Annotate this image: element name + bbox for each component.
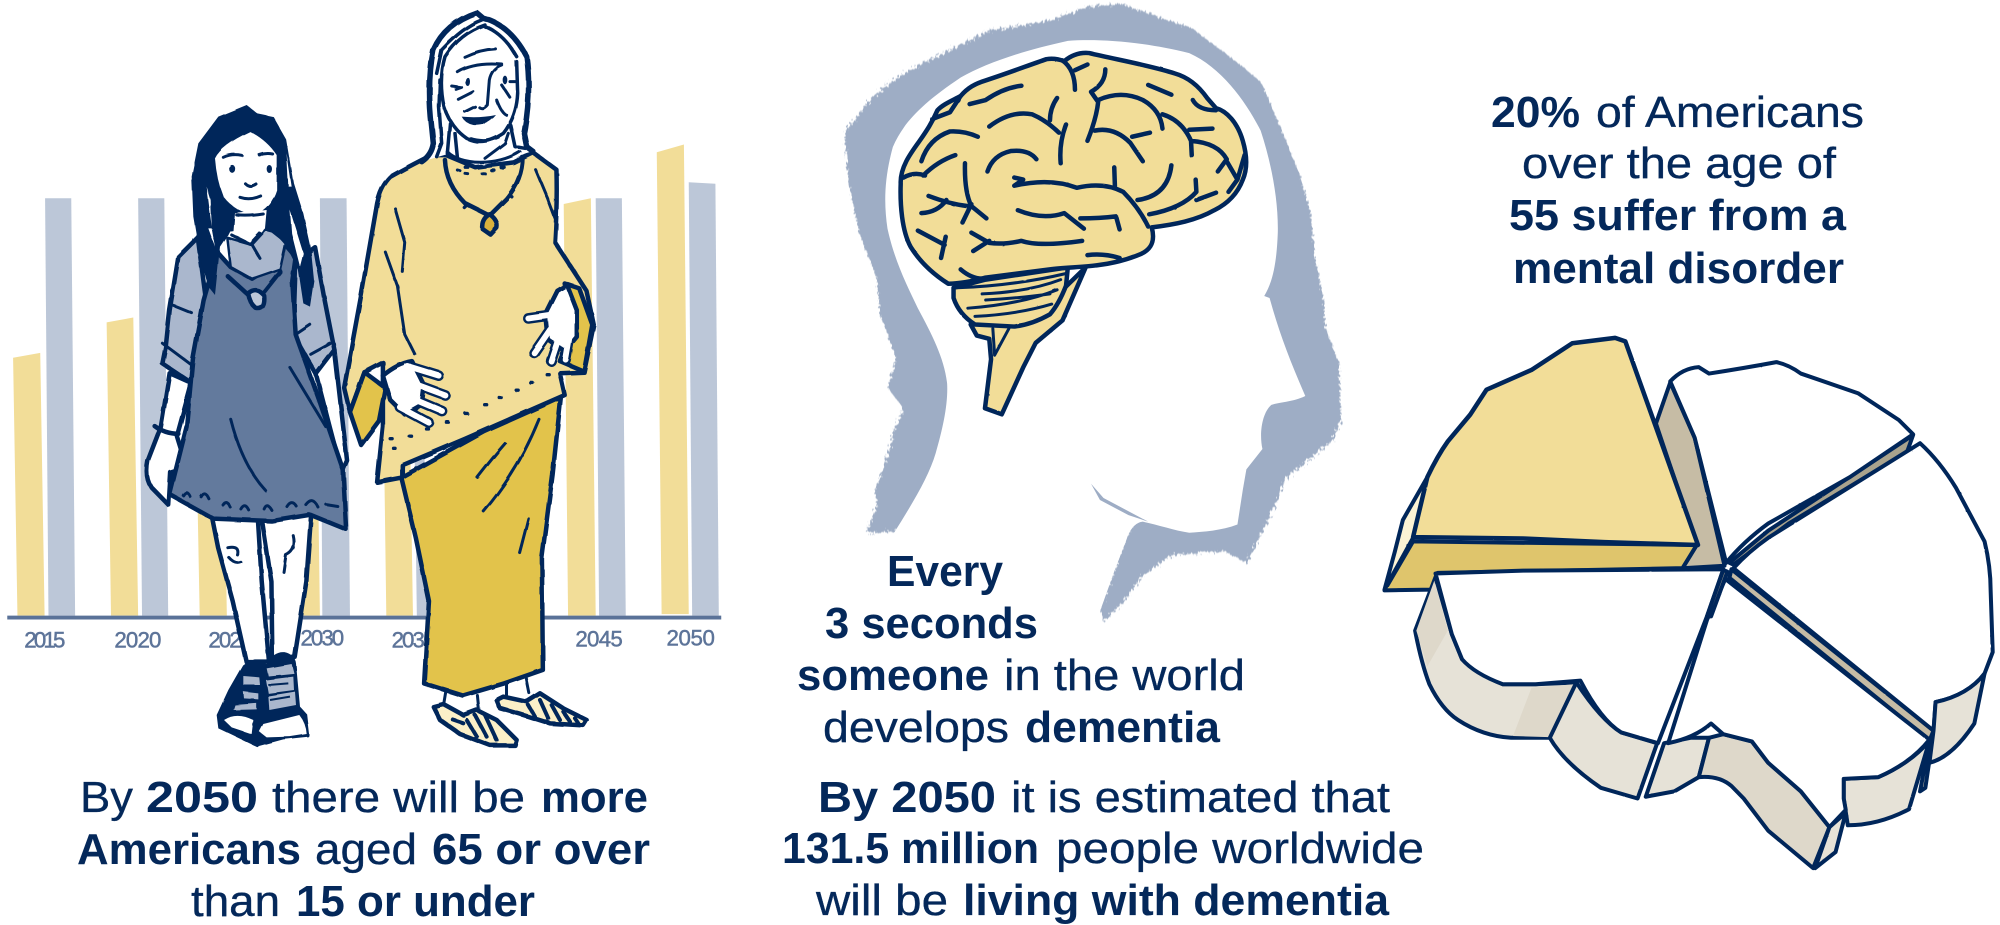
- brain sulci: [904, 60, 1245, 279]
- caption: every 3 seconds: 3 seconds: [825, 599, 1038, 648]
- woman shoes: [433, 693, 587, 745]
- cerebrum: [901, 53, 1246, 284]
- yellow wedge front side: [1384, 541, 1697, 590]
- sliver side of yellow wedge: [1384, 477, 1427, 590]
- woman skirt: [401, 397, 561, 696]
- caption: every 3 seconds: dementia: [1025, 703, 1221, 752]
- wedge side: inner shadow: [1656, 382, 1725, 568]
- girl right arm: [316, 350, 347, 473]
- woman sleeve linings: [350, 284, 592, 445]
- illustration: young girl: [147, 105, 347, 747]
- girl legs: [212, 514, 311, 662]
- caption: mental disorder statistic: [1491, 88, 1864, 293]
- caption: mental disorder statistic: mental disorder: [1513, 244, 1844, 293]
- caption: population: Americans: [77, 825, 301, 874]
- brain illustration: [901, 53, 1246, 414]
- bar chart: population by year: 2050: [666, 626, 715, 651]
- woman necklace: [445, 158, 523, 235]
- caption: dementia 2050 estimate: By 2050: [818, 773, 996, 822]
- caption: every 3 seconds: Every: [887, 547, 1004, 596]
- girl head and hair: [192, 105, 314, 307]
- panel: pie chart: [1384, 338, 1993, 868]
- bar chart: population by year: 2015: [24, 628, 65, 653]
- caption: every 3 seconds: [797, 547, 1245, 752]
- caption: dementia 2050 estimate: 131.5 million: [782, 824, 1039, 873]
- woman right hand: [528, 285, 577, 361]
- white slice: bottom right: [1668, 579, 1929, 827]
- caption: dementia 2050 estimate: it is estimated that: [1011, 773, 1390, 822]
- yellow wedge top: 20 percent: [1413, 338, 1698, 545]
- woman ankles: [444, 676, 529, 710]
- white slice: top: [1729, 435, 1913, 565]
- brainstem: [971, 267, 1086, 414]
- caption: every 3 seconds: someone: [797, 651, 989, 700]
- woman tunic: [344, 153, 594, 482]
- bar chart: population by year: [7, 144, 721, 653]
- woman left hand: [383, 361, 445, 423]
- girl left arm and hand: [147, 373, 191, 505]
- caption: population: aged: [315, 825, 417, 874]
- bar chart: population by year: 2045: [575, 627, 623, 652]
- caption: every 3 seconds: develops: [823, 703, 1009, 752]
- caption: dementia 2050 estimate: people worldwide: [1056, 824, 1424, 873]
- white slice: right: [1729, 569, 1934, 741]
- caption: mental disorder statistic: over the age of: [1522, 139, 1837, 188]
- caption: mental disorder statistic: of Americans: [1596, 88, 1864, 137]
- caption: every 3 seconds: in the world: [1004, 651, 1245, 700]
- white slice: bottom left: [1436, 569, 1723, 743]
- caption: population: 2050: [146, 773, 258, 822]
- caption: population: 15 or under: [296, 877, 535, 925]
- caption: population: there will be: [272, 773, 525, 822]
- caption: mental disorder statistic: 20%: [1491, 88, 1580, 137]
- caption: dementia 2050 estimate: will be: [815, 876, 948, 925]
- head silhouette brush stroke: [845, 4, 1341, 623]
- girl sleeves: [162, 238, 334, 383]
- caption: population: By: [80, 773, 133, 822]
- caption: population: more: [541, 773, 648, 822]
- girl dress: [170, 240, 346, 529]
- girl pendant necklace: [227, 228, 286, 308]
- side walls: outer crust: [1415, 577, 1985, 868]
- bar chart: population by year: 2025: [208, 628, 252, 653]
- bar chart: population by year: 2030: [301, 626, 344, 651]
- caption: dementia 2050 estimate: [782, 773, 1424, 925]
- illustration: older woman: [344, 13, 594, 745]
- caption: population: [77, 773, 650, 925]
- bar chart: population by year: 2035: [392, 628, 435, 653]
- panel: head profile with brain: [845, 4, 1341, 623]
- caption: population: than: [191, 877, 280, 925]
- woman head and hair: [422, 13, 533, 174]
- bar chart: population by year: 2020: [114, 628, 161, 653]
- caption: mental disorder statistic: 55 suffer from a: [1509, 191, 1847, 240]
- caption: population: 65 or over: [432, 825, 650, 874]
- cerebellum: [954, 267, 1068, 327]
- panel: population illustration: [7, 13, 721, 747]
- girl sneakers: [217, 653, 309, 747]
- caption: dementia 2050 estimate: living with dementia: [963, 876, 1390, 925]
